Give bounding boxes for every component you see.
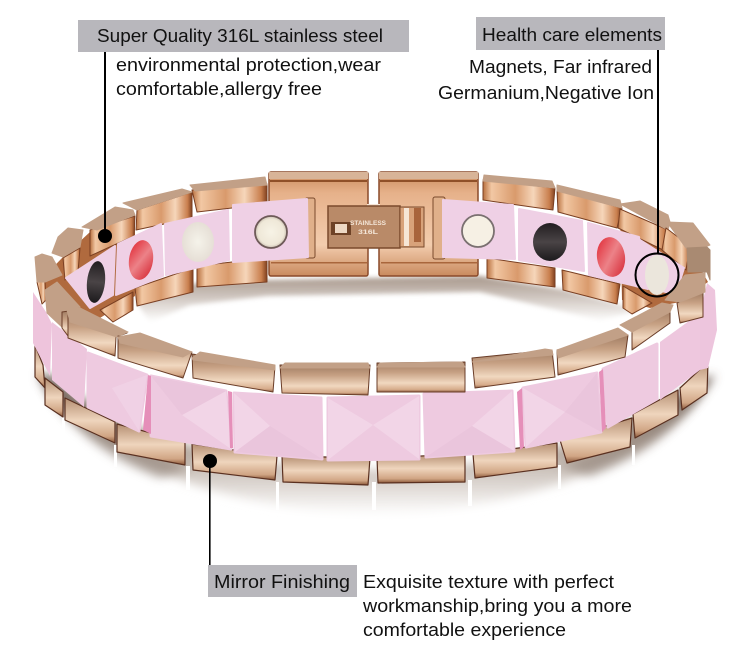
leader line with dot [203,454,217,565]
magnet stones [255,215,494,248]
back link caps left [35,177,267,304]
description: comfortable,allergy free [116,79,322,99]
clasp [269,172,478,276]
callout: stainless steel [78,20,409,243]
heading: Super Quality 316L stainless steel [97,26,383,46]
back link caps right [483,175,710,280]
gold backing right end [620,212,708,308]
label box [476,17,665,50]
label box [78,20,409,52]
front lower links [35,345,708,485]
description: environmental protection,wear [116,55,381,75]
germanium stones [126,235,628,281]
callout: health care elements [438,17,678,296]
gold backing left end [37,214,135,318]
heading: Health care elements [482,25,662,45]
description: comfortable experience [363,620,566,640]
reflection shadow under bracelet [38,276,715,515]
heading: Mirror Finishing [214,572,350,592]
clasp engraving: STAINLESS [350,221,386,227]
negative ion stones [85,223,567,304]
leader line with dot [98,52,112,243]
clasp: 316L [358,230,378,236]
leader line with ring [636,50,678,296]
description: workmanship,bring you a more [362,596,632,616]
front upper links [45,273,705,395]
description: Germanium,Negative Ion [438,83,654,103]
description [116,55,381,99]
bracelet [33,172,717,485]
description [362,572,632,640]
description: Exquisite texture with perfect [363,572,614,592]
far infrared stones [182,222,669,295]
label box [208,565,357,597]
description: Magnets, Far infrared [469,57,652,77]
front ceramic tiles [33,283,717,460]
description [438,57,654,103]
back lower links [100,258,652,322]
back ceramic tiles with stones [66,199,684,308]
callout: mirror finishing [203,454,632,640]
